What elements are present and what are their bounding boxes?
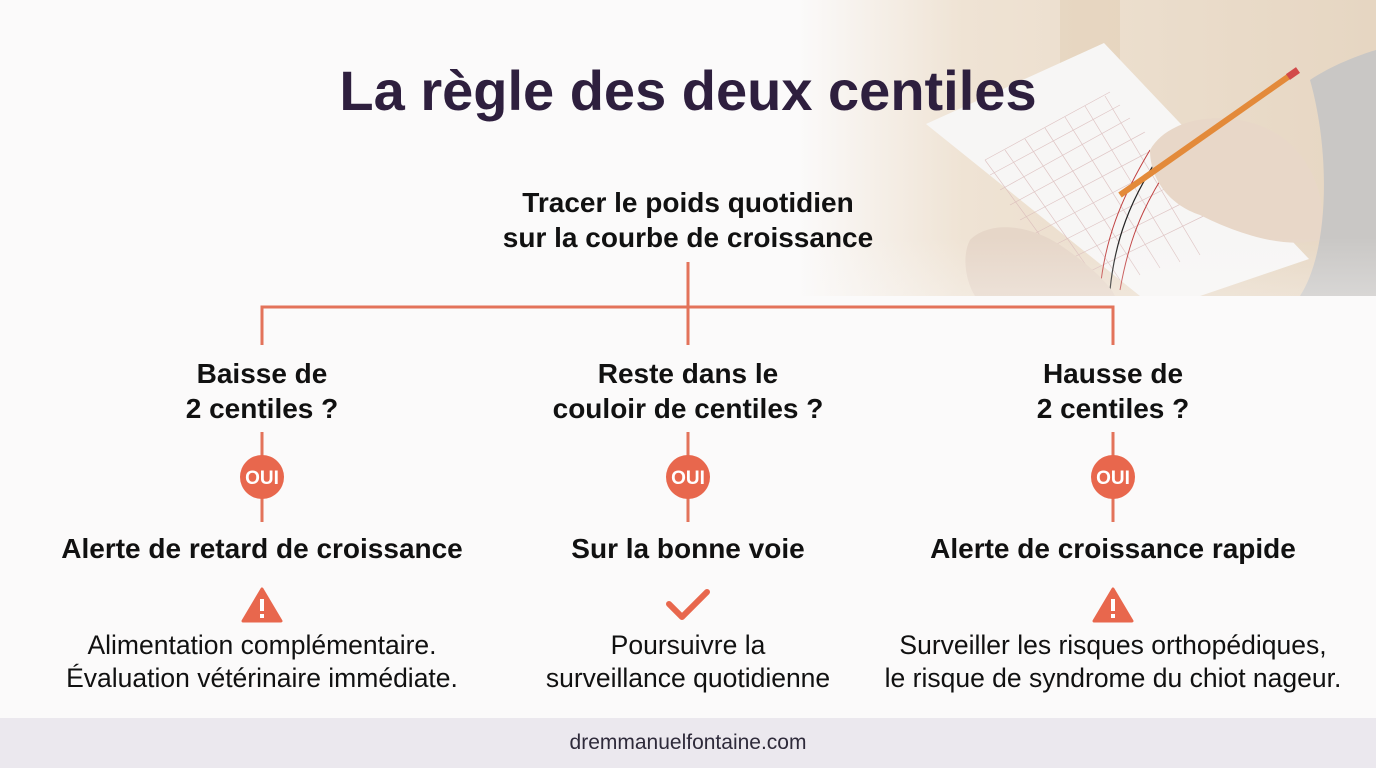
footer: dremmanuelfontaine.com bbox=[570, 731, 806, 754]
question right: Hausse de bbox=[1043, 358, 1183, 389]
connector tree: OUI bbox=[1096, 468, 1130, 489]
footer bbox=[0, 718, 1376, 768]
description right bbox=[885, 630, 1341, 693]
question left: Baisse de bbox=[197, 358, 327, 389]
question right bbox=[1037, 358, 1189, 424]
question middle: Reste dans le bbox=[598, 358, 778, 389]
branch: reste bbox=[546, 358, 830, 693]
description middle: surveillance quotidienne bbox=[546, 663, 830, 693]
icon: check bbox=[666, 589, 710, 620]
question left: 2 centiles ? bbox=[186, 393, 338, 424]
description middle: Poursuivre la bbox=[611, 630, 765, 660]
branch: baisse bbox=[61, 358, 463, 693]
icon: warning right bbox=[1092, 587, 1134, 622]
branch: hausse bbox=[885, 358, 1341, 693]
result left: Alerte de retard de croissance bbox=[61, 533, 463, 564]
question middle bbox=[553, 358, 823, 424]
description left bbox=[66, 630, 458, 693]
icon: warning bbox=[242, 587, 283, 622]
question middle: couloir de centiles ? bbox=[553, 393, 823, 424]
description left: Alimentation complémentaire. bbox=[87, 630, 437, 660]
photo: hand plotting growth chart bbox=[833, 0, 1376, 296]
connector tree: OUI bbox=[245, 468, 279, 489]
root node bbox=[503, 187, 873, 253]
question right: 2 centiles ? bbox=[1037, 393, 1189, 424]
connector tree bbox=[240, 262, 1135, 522]
connector tree: OUI bbox=[671, 468, 705, 489]
root node: Tracer le poids quotidien bbox=[522, 187, 854, 218]
description left: Évaluation vétérinaire immédiate. bbox=[66, 663, 458, 693]
question left bbox=[186, 358, 338, 424]
description right: Surveiller les risques orthopédiques, bbox=[899, 630, 1327, 660]
description right: le risque de syndrome du chiot nageur. bbox=[885, 663, 1341, 693]
description middle bbox=[546, 630, 830, 693]
title: La règle des deux centiles bbox=[339, 59, 1037, 122]
result middle: Sur la bonne voie bbox=[571, 533, 805, 564]
result right: Alerte de croissance rapide bbox=[930, 533, 1296, 564]
root node: sur la courbe de croissance bbox=[503, 222, 873, 253]
